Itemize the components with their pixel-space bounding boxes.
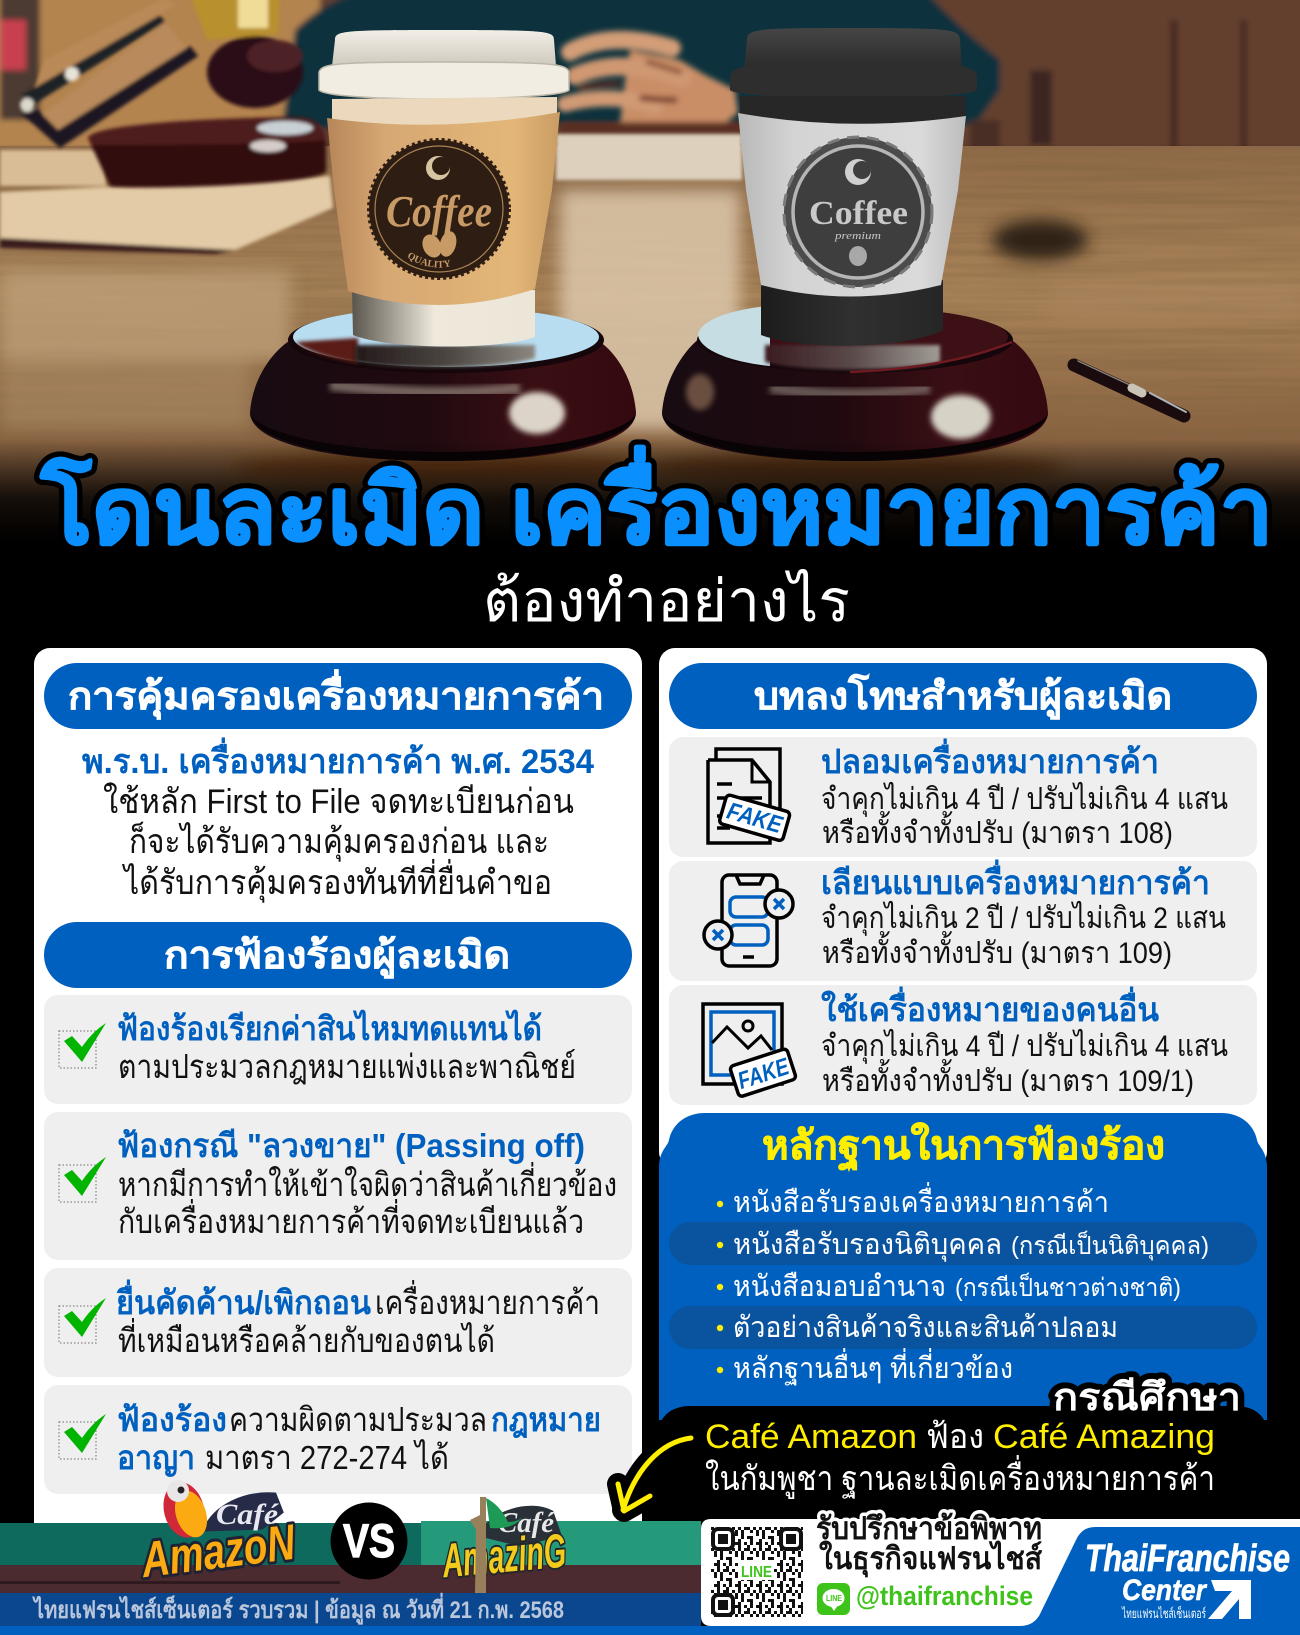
card: counterfeit: จำคุกไม่เกิน 4 ปี / ปรับไม่เกิน 4 แสน	[821, 781, 1228, 818]
icon: phone chat	[704, 875, 793, 966]
card: passing off: กับเครื่องหมายการค้าที่จดทะเบียนแล้ว	[118, 1199, 584, 1240]
text block: act	[82, 737, 594, 903]
logo: Amazon	[137, 1478, 299, 1588]
logo: Amazing	[439, 1497, 568, 1593]
card: counterfeit: หรือทั้งจำทั้งปรับ (มาตรา 108)	[822, 811, 1173, 850]
panel: case study	[650, 1377, 1267, 1522]
wood highlights	[0, 190, 1300, 484]
photo backdrop	[0, 0, 1300, 150]
card: using others' mark: จำคุกไม่เกิน 4 ปี / ปรับไม่เกิน 4 แสน	[821, 1028, 1228, 1065]
evidence heading: หลักฐานในการฟ้องร้อง	[762, 1122, 1165, 1172]
source note: ไทยแฟรนไชส์เซ็นเตอร์ รวบรวม | ข้อมูล ณ วันที่ 21 ก.พ. 2568	[31, 1592, 564, 1625]
card: using others' mark: หรือทั้งจำทั้งปรับ (มาตรา 109/1)	[822, 1059, 1194, 1098]
evidence list: หลักฐานอื่นๆ ที่เกี่ยวข้อง	[733, 1348, 1013, 1386]
card: passing off: หากมีการทำให้เข้าใจผิดว่าสินค้าเกี่ยวข้อง	[118, 1162, 617, 1203]
title: โดนละเมิด เครื่องหมายการค้า	[40, 445, 1273, 563]
VS badge: VS	[343, 1514, 395, 1567]
panel: right white	[659, 648, 1267, 1168]
coffee badge right: Coffee	[809, 195, 908, 232]
card: opposition: ที่เหมือนหรือคล้ายกับของตนได้	[118, 1318, 495, 1359]
coffee badge right: premium	[834, 230, 881, 242]
evidence list	[717, 1182, 1209, 1386]
icon: check	[59, 1157, 106, 1202]
logo: Amazon: AmazoN	[137, 1514, 299, 1588]
heading: penalties	[669, 663, 1257, 729]
heading: lawsuit	[44, 922, 632, 988]
coffee badge left: Coffee	[386, 187, 492, 236]
evidence list: หนังสือรับรองนิติบุคคล	[733, 1229, 1002, 1262]
icon: QR code	[711, 1527, 803, 1617]
coffee badge right	[784, 137, 932, 287]
card: counterfeit: ปลอมเครื่องหมายการค้า	[821, 738, 1159, 780]
logo: Amazing: Café	[498, 1508, 556, 1539]
logo: ThaiFranchise Center: Center	[1122, 1574, 1208, 1607]
card: damages	[44, 995, 632, 1104]
hands	[560, 40, 745, 134]
icon: check	[59, 1023, 106, 1068]
case study text: ฟ้อง	[926, 1418, 984, 1456]
text block: act: ได้รับการคุ้มครองทันทีที่ยื่นคำขอ	[121, 859, 552, 903]
panel: evidence	[659, 1113, 1267, 1420]
card: criminal: กฎหมาย	[491, 1401, 601, 1438]
card: opposition: ยื่นคัดค้าน/เพิกถอน	[116, 1279, 371, 1321]
gavel base right	[662, 306, 1048, 461]
card: imitation: เลียนแบบเครื่องหมายการค้า	[821, 859, 1210, 901]
icon: QR code: LINE	[741, 1564, 772, 1581]
background gavel	[20, 0, 326, 187]
photo bottom fade	[0, 440, 1300, 570]
text block: act: ก็จะได้รับความคุ้มครองก่อน และ	[129, 821, 549, 862]
case study text: ในกัมพูชา ฐานละเมิดเครื่องหมายการค้า	[705, 1455, 1215, 1499]
icon: LINE	[817, 1583, 850, 1615]
subtitle: ต้องทำอย่างไร	[483, 568, 850, 634]
card: criminal: ความผิดตามประมวล	[229, 1401, 487, 1438]
icon: fake picture	[703, 1004, 796, 1097]
sleeve	[327, 112, 560, 305]
arrow to case study	[618, 1438, 691, 1511]
heading: lawsuit: การฟ้องร้องผู้ละเมิด	[164, 935, 510, 979]
logo: ThaiFranchise Center	[1000, 1527, 1300, 1635]
evidence list: หนังสือรับรองเครื่องหมายการค้า	[733, 1182, 1109, 1219]
card: using others' mark	[669, 985, 1257, 1105]
coffee badge left	[367, 138, 511, 280]
heading: protection	[44, 663, 632, 729]
background papers	[0, 134, 742, 254]
card: criminal	[44, 1385, 632, 1494]
case study text: Café Amazing	[993, 1418, 1215, 1456]
consult text: รับปรึกษาข้อพิพาท	[816, 1511, 1042, 1546]
logo: Amazing: AmazinG	[439, 1525, 568, 1588]
arrow mark	[1208, 1580, 1251, 1619]
case study text	[705, 1418, 1215, 1499]
case study text: Café Amazon	[705, 1418, 917, 1456]
card: damages: ตามประมวลกฎหมายแพ่งและพาณิชย์	[118, 1048, 576, 1085]
VS badge	[330, 1502, 408, 1580]
card: passing off	[44, 1112, 632, 1260]
evidence list: (กรณีเป็นชาวต่างชาติ)	[955, 1272, 1181, 1302]
logo: Amazon: Café	[216, 1498, 280, 1531]
consult text	[816, 1511, 1042, 1578]
contact box: QR and LINE	[701, 1511, 1300, 1626]
icon: fake document	[708, 749, 790, 843]
card: counterfeit	[669, 737, 1257, 857]
icon: LINE: LINE	[826, 1594, 843, 1603]
card: using others' mark: ใช้เครื่องหมายของคนอื่น	[821, 986, 1159, 1028]
card: opposition: เครื่องหมายการค้า	[375, 1280, 600, 1321]
heading: penalties: บทลงโทษสำหรับผู้ละเมิด	[754, 673, 1172, 720]
gavel base left	[250, 307, 636, 461]
cup right	[730, 28, 977, 346]
parrot	[158, 1478, 213, 1542]
card: criminal: ฟ้องร้อง	[117, 1401, 227, 1438]
icon: fake picture: FAKE	[735, 1053, 793, 1095]
wood grain	[0, 146, 1300, 466]
evidence list: หนังสือมอบอำนาจ	[733, 1271, 946, 1303]
card: criminal: อาญา	[117, 1439, 195, 1477]
heading: protection: การคุ้มครองเครื่องหมายการค้า	[68, 669, 604, 720]
case study label: กรณีศึกษา	[1053, 1377, 1241, 1419]
pen	[1074, 361, 1186, 416]
card: damages: ฟ้องร้องเรียกค่าสินไหมทดแทนได้	[117, 1009, 542, 1047]
evidence list: (กรณีเป็นนิติบุคคล)	[1011, 1230, 1209, 1261]
wooden table	[0, 146, 1300, 570]
bottom band: storefront	[0, 1478, 1300, 1635]
card: imitation	[669, 859, 1257, 981]
card: imitation: จำคุกไม่เกิน 2 ปี / ปรับไม่เกิน 2 แสน	[821, 900, 1226, 937]
icon: check	[59, 1298, 106, 1343]
logo: ThaiFranchise Center: ไทยแฟรนไชส์เซ็นเตอร์	[1121, 1604, 1206, 1621]
panel: left white	[34, 648, 642, 1548]
card: passing off: ฟ้องกรณี "ลวงขาย" (Passing off)	[117, 1127, 585, 1164]
card: imitation: หรือทั้งจำทั้งปรับ (มาตรา 109)	[822, 931, 1172, 970]
text block: act: พ.ร.บ. เครื่องหมายการค้า พ.ศ. 2534	[82, 737, 594, 781]
icon: check	[59, 1414, 106, 1459]
icon: fake document: FAKE	[724, 798, 786, 839]
LINE handle: @thaifranchise	[856, 1581, 1033, 1611]
cup left	[279, 30, 610, 365]
sleeve	[738, 113, 966, 296]
hero photo: two cups on gavel bases	[0, 0, 1300, 524]
card: opposition	[44, 1268, 632, 1377]
card: criminal: มาตรา 272-274 ได้	[205, 1439, 449, 1476]
title: โดนละเมิด เครื่องหมายการค้า	[40, 445, 1273, 563]
evidence list: ตัวอย่างสินค้าจริงและสินค้าปลอม	[733, 1312, 1118, 1344]
coffee badge left: QUALITY	[408, 252, 450, 268]
consult text: ในธุรกิจแฟรนไชส์	[819, 1540, 1042, 1578]
text block: act: ใช้หลัก First to File จดทะเบียนก่อน	[103, 782, 574, 821]
